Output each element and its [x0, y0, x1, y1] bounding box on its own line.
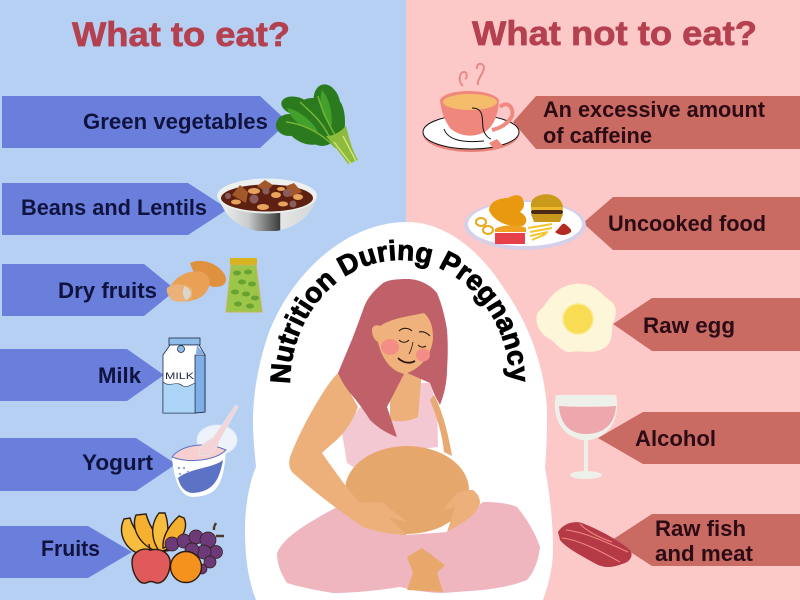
cheeks [381, 339, 430, 362]
belly [345, 446, 469, 534]
arrow: beans and lentils [2, 183, 228, 235]
arrow: raw egg [613, 298, 800, 351]
far arm [430, 395, 452, 456]
label: uncooked food: Uncooked food [608, 211, 766, 236]
panel: what not to eat background [406, 0, 800, 600]
label: caffeine line 2: of caffeine [543, 123, 652, 148]
label: beans and lentils: Beans and Lentils [21, 195, 207, 220]
foot [407, 548, 445, 592]
arrow: yogurt [0, 438, 176, 491]
hair [338, 279, 448, 437]
icon: yogurt cup [172, 405, 238, 497]
arrow: milk [0, 349, 164, 401]
torso top [342, 383, 438, 467]
face [372, 313, 433, 374]
eyes and mouth [398, 328, 430, 363]
heading: what to eat: What to eat? [72, 16, 290, 54]
panel: central white blob [245, 222, 553, 600]
panel: left food rows [0, 96, 288, 578]
icon: bowl of beans [217, 178, 317, 231]
arrow: green vegetables [2, 96, 288, 148]
arrow: alcohol [598, 412, 800, 464]
neck and chest [390, 370, 422, 421]
label: milk: Milk [98, 363, 142, 388]
icon: raw egg [536, 284, 616, 352]
label: alcohol: Alcohol [635, 426, 716, 451]
label: yogurt: Yogurt [82, 450, 154, 475]
label: and meat: and meat [655, 541, 754, 566]
label: green vegetables: Green vegetables [83, 109, 268, 134]
icon: milk carton: MILK [165, 371, 195, 382]
label: raw fish: Raw fish [655, 516, 746, 541]
arrow: raw fish and meat [612, 514, 800, 566]
hand on belly [443, 490, 480, 532]
icon: fruits [122, 513, 224, 583]
icon: raw fish fillet [558, 522, 632, 567]
illustration: pregnant woman [277, 279, 540, 593]
label: raw egg: Raw egg [643, 313, 735, 338]
heading: what not to eat: What not to eat? [472, 15, 757, 53]
label: caffeine line 1: An excessive amount [543, 97, 766, 122]
panel: right food rows [513, 96, 800, 566]
title: curved text: Nutrition During Pregnancy [270, 239, 526, 383]
label: fruits: Fruits [41, 536, 100, 561]
legs [277, 502, 540, 593]
icon: plate of fast food [464, 194, 586, 250]
arrow: uncooked food [583, 197, 800, 250]
label: dry fruits: Dry fruits [58, 278, 157, 303]
icon: wine glass [555, 395, 617, 479]
panel: what to eat background [0, 0, 406, 600]
icon: almonds and jar [167, 258, 262, 312]
icon: tea cup with saucer [423, 64, 519, 152]
icon: spinach [276, 81, 358, 164]
near arm [289, 373, 407, 535]
arrow: caffeine [513, 96, 800, 149]
icon: milk carton [163, 338, 205, 413]
arrow: fruits [0, 526, 132, 578]
arrow: dry fruits [2, 264, 176, 316]
